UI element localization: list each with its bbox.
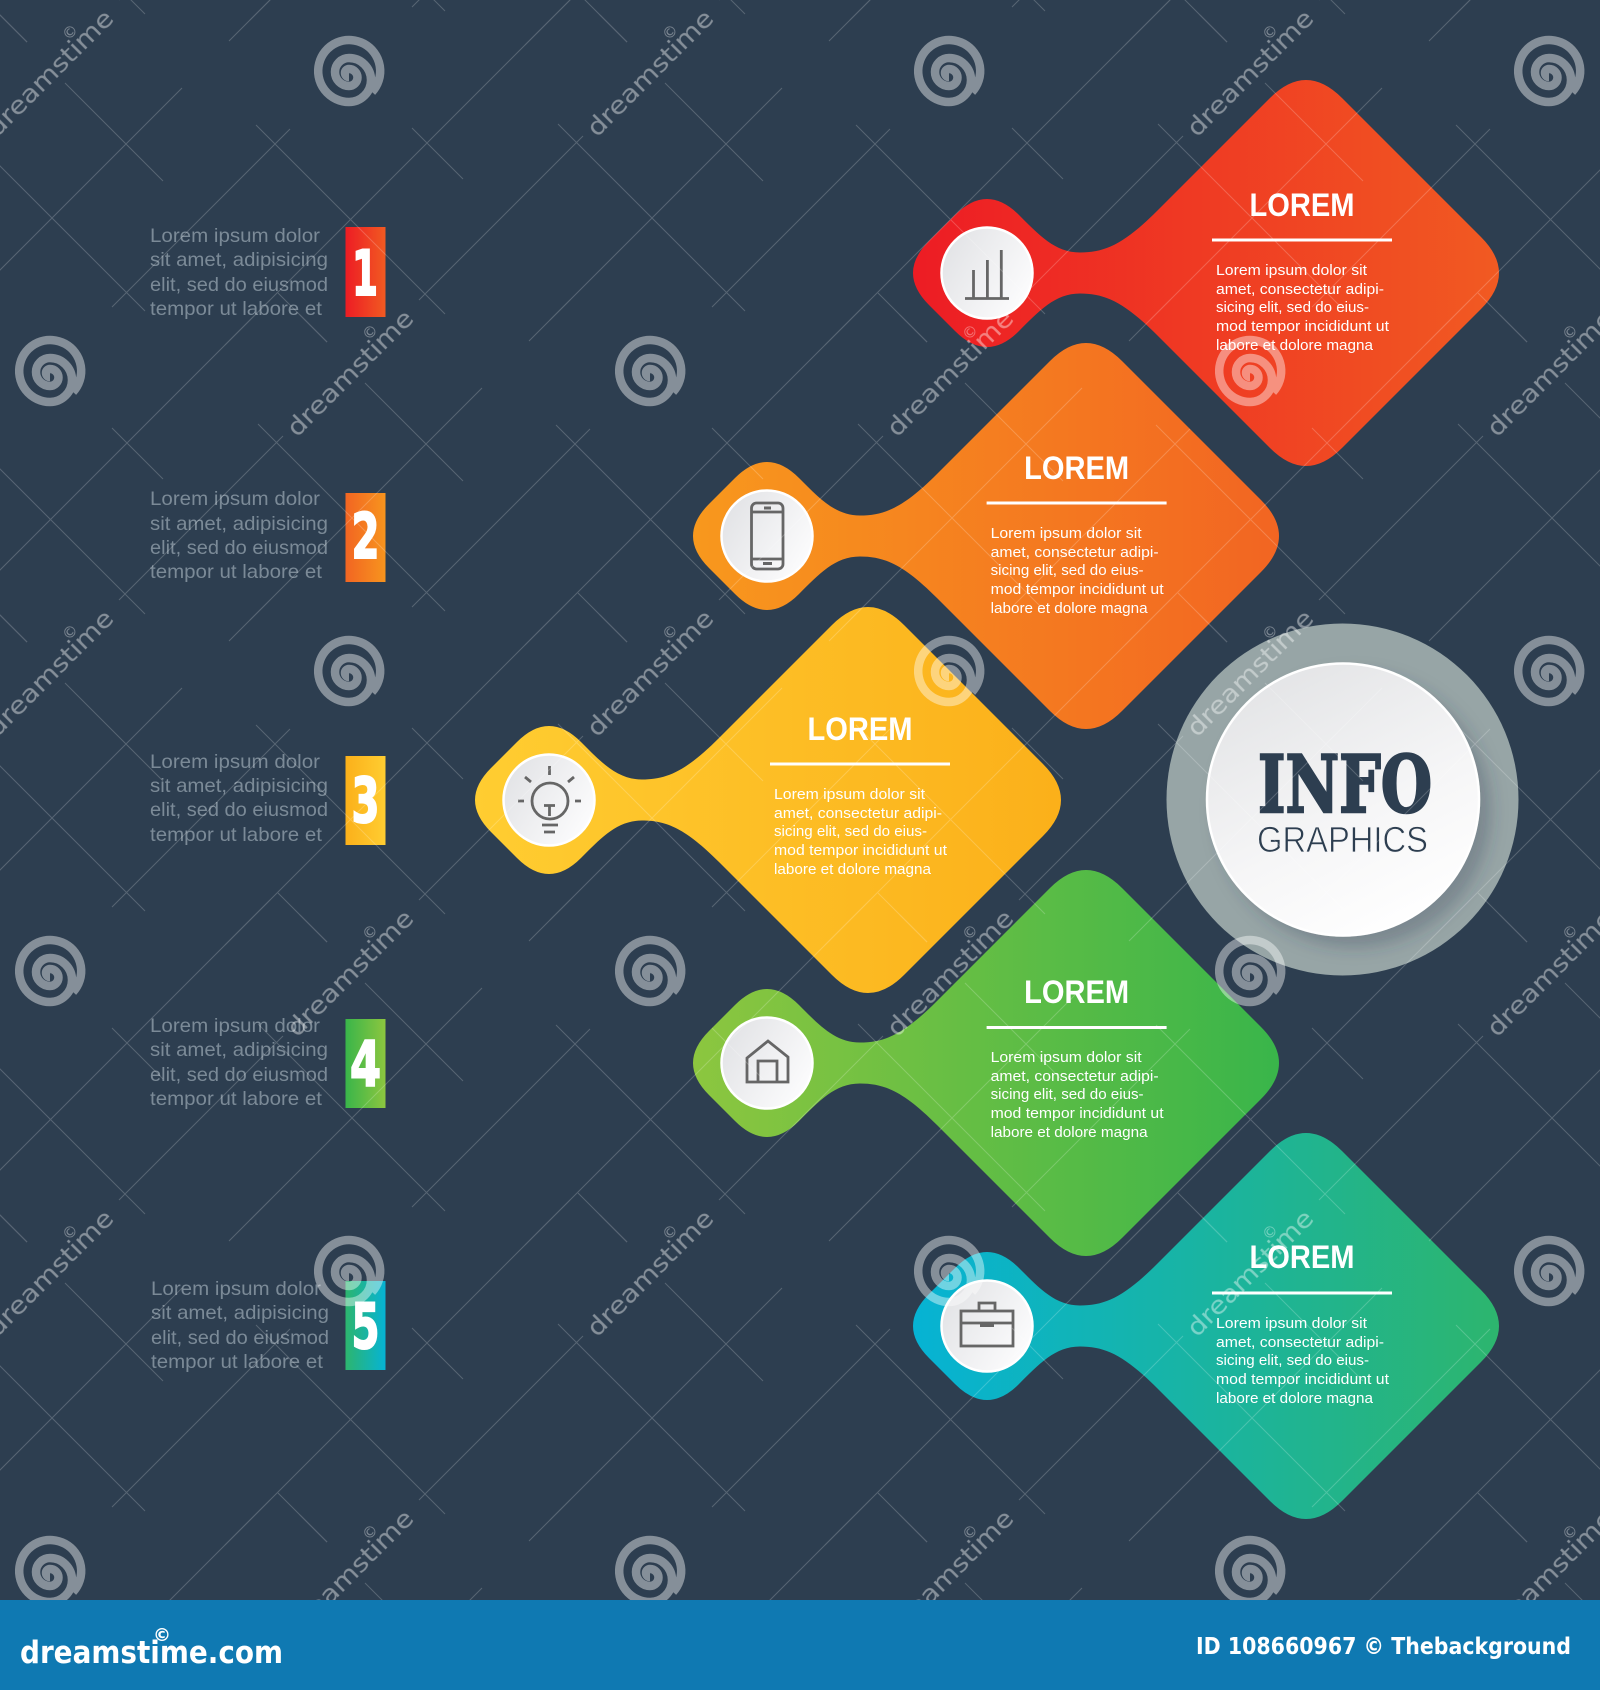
watermark overlay: © [59, 1221, 82, 1244]
icon circle 2 [722, 490, 812, 582]
body text 5: labore et dolore magna [1216, 1390, 1374, 1407]
body text 5: sicing elit, sed do eius- [1216, 1352, 1369, 1369]
legend text 5 [151, 1278, 329, 1373]
panel: step 3 yellow [475, 607, 1061, 993]
body text 2: amet, consectetur adipi- [991, 544, 1159, 561]
icon: briefcase [961, 1303, 1013, 1346]
legend text 1: sit amet, adipisicing [150, 249, 328, 271]
watermark overlay: dreamstime [581, 4, 719, 142]
body text 2: labore et dolore magna [991, 600, 1148, 617]
body text 1: amet, consectetur adipi- [1216, 281, 1384, 298]
shape 3 [475, 607, 1061, 993]
legend row 2 [150, 488, 386, 583]
legend text 2: elit, sed do eiusmod [150, 537, 328, 559]
rule 3 [770, 762, 950, 766]
watermark overlay: © [1559, 1521, 1582, 1544]
legend text 4: Lorem ipsum dolor [150, 1015, 321, 1037]
number box 1 [346, 227, 386, 317]
legend row 1 [150, 225, 386, 320]
watermark overlay: © [1559, 321, 1582, 344]
watermark overlay: © [359, 321, 382, 344]
badge inner disc [1207, 664, 1479, 936]
body text 3: mod tempor incididunt ut [774, 842, 948, 859]
heading 4: LOREM [1024, 974, 1129, 1010]
watermark overlay: dreamstime [881, 1504, 1019, 1642]
body text 1 [1216, 262, 1390, 354]
number box 4 [346, 1019, 386, 1108]
legend text 3: sit amet, adipisicing [150, 775, 328, 797]
legend text 5: elit, sed do eiusmod [151, 1327, 329, 1349]
icon: light bulb [518, 766, 581, 832]
legend row 4 [150, 1015, 386, 1110]
watermark overlay: © [59, 21, 82, 44]
legend text 1: Lorem ipsum dolor [150, 225, 321, 247]
body text 1: mod tempor incididunt ut [1216, 318, 1390, 335]
watermark overlay: © [659, 1221, 682, 1244]
legend text 4: sit amet, adipisicing [150, 1039, 328, 1061]
body text 4: Lorem ipsum dolor sit [991, 1049, 1142, 1066]
body text 4: mod tempor incididunt ut [991, 1105, 1164, 1122]
legend text 3: tempor ut labore et [150, 824, 323, 846]
heading 1: LOREM [1250, 187, 1354, 223]
body text 2: sicing elit, sed do eius- [991, 562, 1144, 579]
legend text 2: sit amet, adipisicing [150, 513, 328, 535]
badge title: INFO [1258, 738, 1432, 831]
legend row 5 [151, 1278, 386, 1373]
watermark overlay: © [359, 1521, 382, 1544]
watermark overlay: dreamstime [281, 904, 419, 1042]
body text 2 [991, 525, 1164, 617]
badge outer ring [1166, 624, 1518, 976]
number 2: 2 [352, 500, 380, 573]
body text 4: sicing elit, sed do eius- [991, 1086, 1144, 1103]
legend text 2 [150, 488, 328, 583]
shape 5 [913, 1133, 1499, 1519]
watermark overlay: © [359, 921, 382, 944]
watermark overlay: dreamstime [1181, 604, 1319, 742]
watermark overlay: © [59, 621, 82, 644]
footer logo mark: © [153, 1625, 171, 1646]
number 1: 1 [352, 237, 378, 310]
body text 5: Lorem ipsum dolor sit [1216, 1315, 1368, 1332]
rule 2 [987, 502, 1167, 504]
watermark overlay: dreamstime [881, 304, 1019, 442]
body text 4: labore et dolore magna [991, 1124, 1148, 1141]
watermark overlay: dreamstime [281, 304, 419, 442]
number 3: 3 [352, 764, 380, 837]
body text 2: Lorem ipsum dolor sit [991, 525, 1142, 542]
shape 4 [693, 870, 1279, 1256]
shape 2 [693, 343, 1279, 729]
panel: step 5 teal [913, 1133, 1499, 1519]
body text 3: labore et dolore magna [774, 861, 932, 878]
heading 2: LOREM [1024, 450, 1129, 486]
legend text 4 [150, 1015, 328, 1110]
footer logo text: dreamstime.com [20, 1635, 283, 1671]
watermark overlay: © [959, 921, 982, 944]
icon circle 1 [942, 228, 1032, 318]
legend text 5: sit amet, adipisicing [151, 1302, 329, 1324]
rule 5 [1212, 1292, 1392, 1294]
number 4: 4 [350, 1028, 381, 1101]
legend text 1: elit, sed do eiusmod [150, 274, 328, 296]
watermark overlay: dreamstime [581, 1204, 719, 1342]
legend text 2: Lorem ipsum dolor [150, 488, 321, 510]
body text 5 [1216, 1315, 1390, 1407]
body text 2: mod tempor incididunt ut [991, 581, 1164, 598]
body text 4 [991, 1049, 1164, 1141]
body text 1: Lorem ipsum dolor sit [1216, 262, 1368, 279]
heading 3: LOREM [808, 711, 912, 747]
watermark overlay: © [1259, 21, 1282, 44]
shape 1 [913, 80, 1499, 466]
body text 5: mod tempor incididunt ut [1216, 1371, 1390, 1388]
watermark overlay: © [1559, 921, 1582, 944]
watermark overlay: dreamstime [281, 1504, 419, 1642]
body text 3: amet, consectetur adipi- [774, 805, 942, 822]
legend text 5: tempor ut labore et [151, 1351, 324, 1373]
icon circle 3 [504, 754, 594, 846]
body text 3: sicing elit, sed do eius- [774, 823, 927, 840]
legend text 5: Lorem ipsum dolor [151, 1278, 322, 1300]
panel: step 2 orange [693, 343, 1279, 729]
legend text 3 [150, 751, 328, 846]
rule 1 [1212, 238, 1392, 242]
legend text 4: tempor ut labore et [150, 1088, 323, 1110]
badge subtitle: GRAPHICS [1257, 819, 1428, 860]
legend text 2: tempor ut labore et [150, 561, 323, 583]
body text 1: labore et dolore magna [1216, 337, 1374, 354]
legend text 1 [150, 225, 328, 320]
legend text 4: elit, sed do eiusmod [150, 1064, 328, 1086]
number box 2 [346, 493, 386, 582]
watermark overlay: dreamstime [581, 604, 719, 742]
legend text 3: elit, sed do eiusmod [150, 799, 328, 821]
body text 3 [774, 786, 948, 878]
watermark overlay: dreamstime [1181, 1204, 1319, 1342]
body text 3: Lorem ipsum dolor sit [774, 786, 926, 803]
watermark overlay: © [959, 321, 982, 344]
footer bar [0, 1600, 1600, 1690]
icon: bar chart [965, 250, 1009, 298]
panel: step 4 green [693, 870, 1279, 1256]
watermark overlay: © [959, 1521, 982, 1544]
number 5: 5 [352, 1290, 380, 1363]
icon circle 4 [722, 1018, 812, 1108]
panel: step 1 red [913, 80, 1499, 466]
icon circle 5 [942, 1280, 1032, 1372]
icon: house [747, 1041, 788, 1082]
watermark overlay: dreamstime [1181, 4, 1319, 142]
legend text 3: Lorem ipsum dolor [150, 751, 321, 773]
watermark overlay: © [1259, 1221, 1282, 1244]
watermark overlay: © [1259, 621, 1282, 644]
watermark overlay: © [659, 621, 682, 644]
legend text 1: tempor ut labore et [150, 298, 323, 320]
rule 4 [987, 1026, 1167, 1029]
number box 3 [346, 756, 386, 845]
watermark overlay: © [659, 21, 682, 44]
heading 5: LOREM [1250, 1239, 1354, 1275]
watermark overlay: dreamstime [881, 904, 1019, 1042]
body text 1: sicing elit, sed do eius- [1216, 299, 1369, 316]
body text 4: amet, consectetur adipi- [991, 1068, 1159, 1085]
icon: smartphone [752, 503, 783, 569]
legend row 3 [150, 751, 386, 846]
body text 5: amet, consectetur adipi- [1216, 1334, 1384, 1351]
center badge: info graphics [1166, 624, 1518, 976]
number box 5 [346, 1281, 386, 1370]
